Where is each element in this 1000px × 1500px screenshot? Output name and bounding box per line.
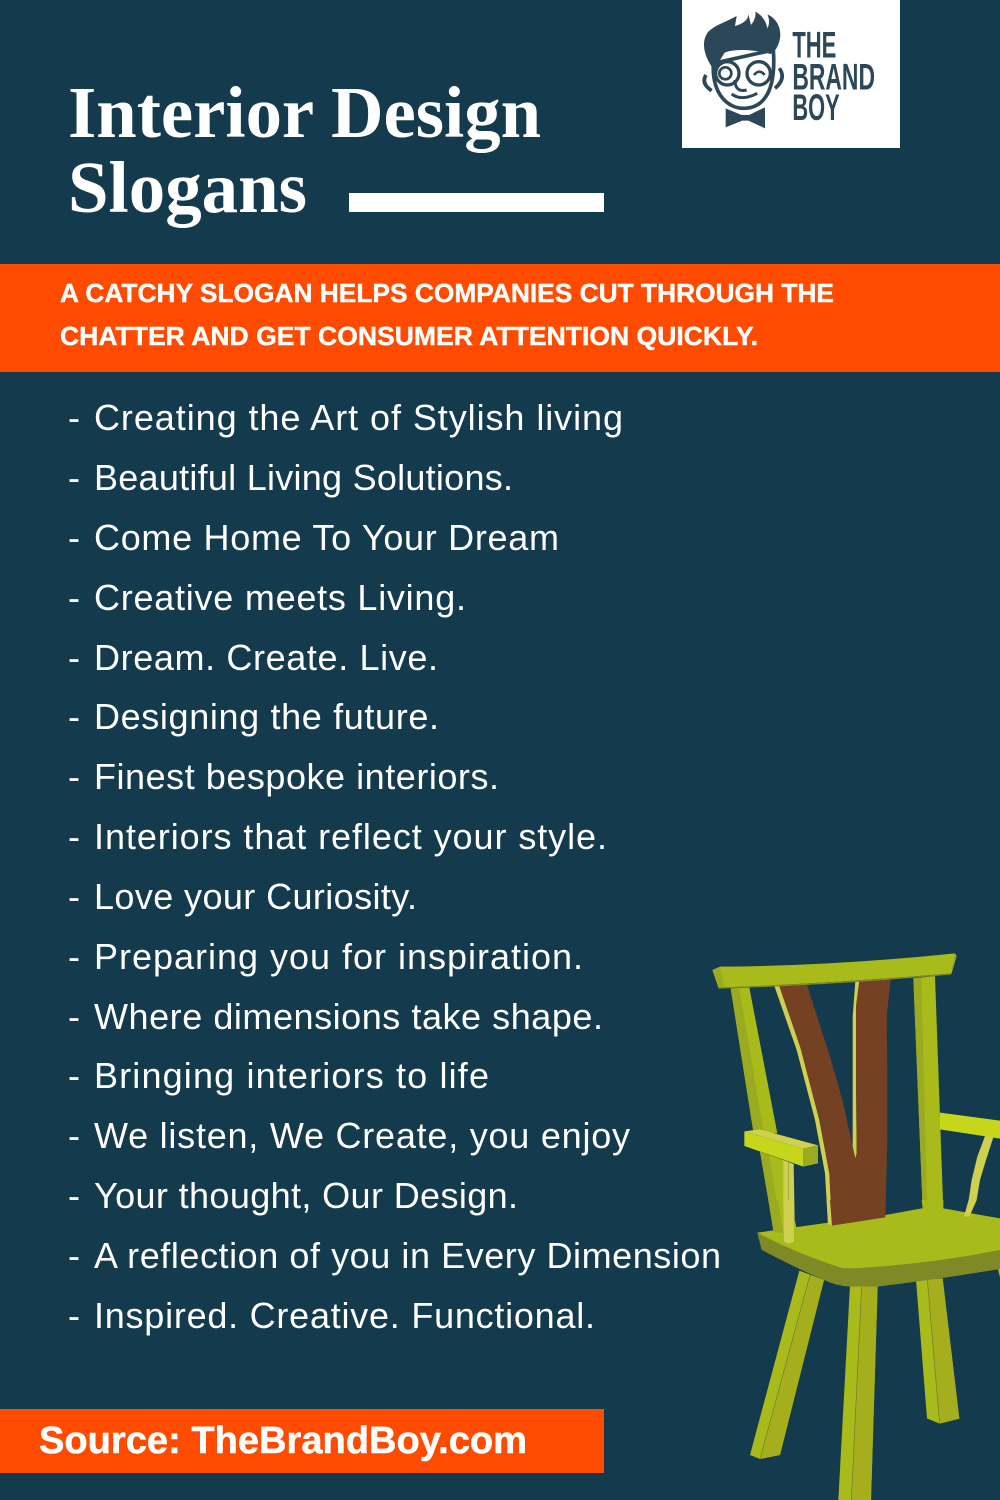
slogan list: Creative meets Living. bbox=[94, 577, 466, 618]
right arm and spindle bbox=[940, 1113, 1000, 1217]
icon: boy mascot bbox=[704, 12, 782, 128]
source banner: Source: TheBrandBoy.com bbox=[39, 1420, 527, 1462]
logo wordmark: BOY bbox=[792, 86, 840, 128]
slogan list: - bbox=[68, 936, 90, 977]
slogan list: Designing the future. bbox=[94, 696, 439, 737]
seat front joints bbox=[768, 1200, 977, 1244]
slogan list: Finest bespoke interiors. bbox=[94, 756, 499, 797]
slogan list: - bbox=[68, 1235, 90, 1276]
chair lower: seat and legs bbox=[750, 1200, 1000, 1500]
slogan list: Where dimensions take shape. bbox=[94, 996, 603, 1037]
slogan list: Beautiful Living Solutions. bbox=[94, 457, 513, 498]
source banner bbox=[0, 1409, 604, 1473]
slogan list: - bbox=[68, 457, 90, 498]
slogan list: - bbox=[68, 397, 90, 438]
title bbox=[68, 72, 541, 228]
logo wordmark: THE bbox=[792, 23, 836, 65]
slogan list: - bbox=[68, 1295, 90, 1336]
legs bbox=[750, 1268, 1000, 1500]
slogan list: Come Home To Your Dream bbox=[94, 517, 559, 558]
slogan list: - bbox=[68, 876, 90, 917]
title underline bar bbox=[349, 193, 604, 212]
slogan list: Preparing you for inspiration. bbox=[94, 936, 583, 977]
slogan list: - bbox=[68, 1175, 90, 1216]
slogan list bbox=[68, 397, 721, 1336]
left back post bbox=[731, 988, 795, 1233]
slogan list: - bbox=[68, 696, 90, 737]
slogan list: - bbox=[68, 517, 90, 558]
slogan list: - bbox=[68, 996, 90, 1037]
right back post bbox=[913, 976, 943, 1211]
slogan list: - bbox=[68, 756, 90, 797]
slogan list: Inspired. Creative. Functional. bbox=[94, 1295, 595, 1336]
slogan list: - bbox=[68, 1115, 90, 1156]
logo wordmark bbox=[792, 23, 875, 128]
slogan list: - bbox=[68, 577, 90, 618]
splat: brown back panel bbox=[774, 979, 891, 1226]
slogan list: - bbox=[68, 1055, 90, 1096]
slogan list: Creating the Art of Stylish living bbox=[94, 397, 623, 438]
logo wordmark: BRAND bbox=[792, 55, 875, 97]
logo: The Brand Boy bbox=[682, 0, 900, 148]
chair illustration bbox=[712, 953, 1000, 1500]
slogan list: - bbox=[68, 816, 90, 857]
title: Slogans bbox=[68, 147, 307, 228]
chair upper: back and arms bbox=[712, 953, 1000, 1240]
top rail bbox=[712, 953, 957, 989]
orange intro banner: CHATTER AND GET CONSUMER ATTENTION QUICKLY. bbox=[60, 321, 758, 351]
seat bbox=[757, 1208, 1000, 1287]
title: Interior Design bbox=[68, 72, 541, 153]
slogan list: Love your Curiosity. bbox=[94, 876, 417, 917]
left arm bbox=[744, 1129, 818, 1240]
orange intro banner bbox=[0, 264, 1000, 372]
slogan list: Interiors that reflect your style. bbox=[94, 816, 607, 857]
slogan list: Bringing interiors to life bbox=[94, 1055, 489, 1096]
slogan list: We listen, We Create, you enjoy bbox=[94, 1115, 630, 1156]
slogan list: A reflection of you in Every Dimension bbox=[94, 1235, 721, 1276]
orange intro banner: A CATCHY SLOGAN HELPS COMPANIES CUT THROUGH THE bbox=[60, 278, 834, 308]
slogan list: Your thought, Our Design. bbox=[94, 1175, 518, 1216]
slogan list: - bbox=[68, 637, 90, 678]
slogan list: Dream. Create. Live. bbox=[94, 637, 438, 678]
